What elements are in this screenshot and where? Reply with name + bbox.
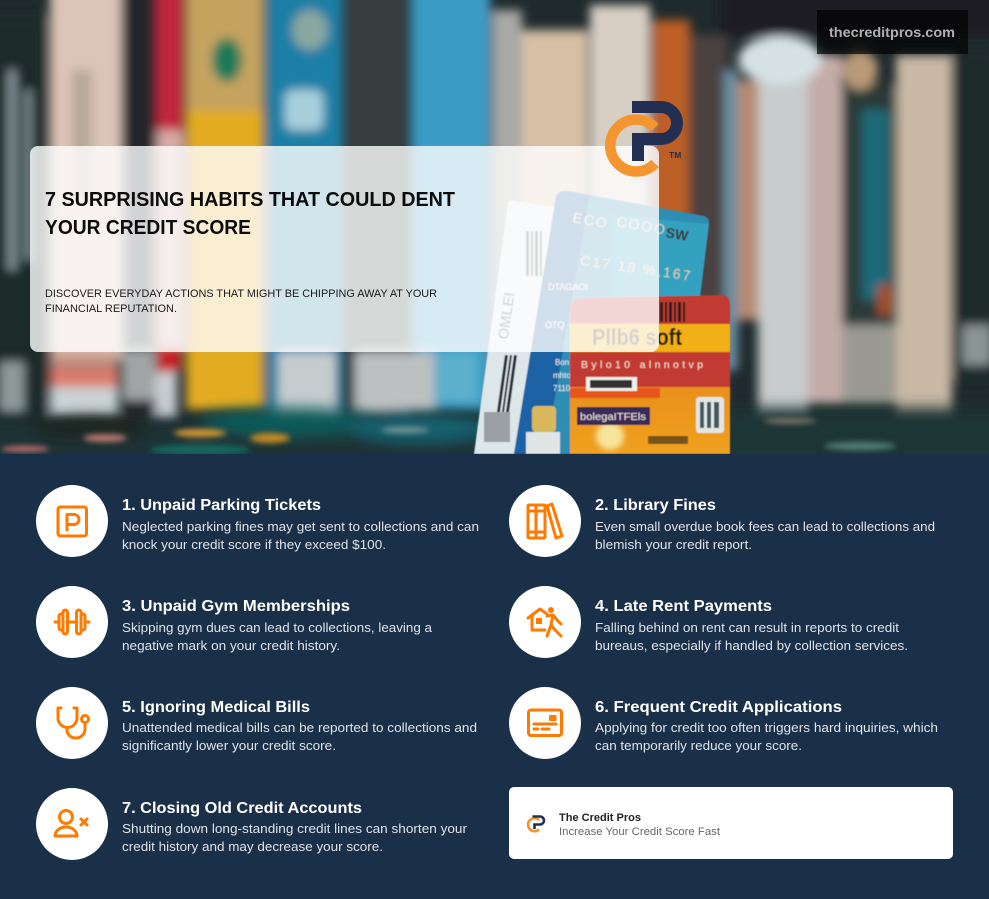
blue card: DTAGAOI	[548, 282, 588, 292]
orange card	[570, 295, 730, 454]
hero panel	[30, 146, 659, 352]
icon: books	[509, 485, 581, 557]
item 4: late rent payments: Falling behind on rent can result in reports to credit	[595, 620, 899, 635]
white card	[474, 201, 556, 454]
item 7: closing old credit accounts: 7. Closing Old Credit Accounts	[122, 800, 362, 817]
item 6: frequent credit applications: Applying for credit too often triggers hard inquiries, which	[595, 720, 938, 735]
brand card	[509, 787, 953, 859]
title	[45, 189, 455, 239]
item 5: ignoring medical bills: 5. Ignoring Medical Bills	[122, 699, 310, 716]
logo: The Credit Pros: TM	[669, 150, 681, 160]
subtitle	[45, 288, 437, 315]
item 3: unpaid gym memberships: 3. Unpaid Gym Memberships	[122, 598, 350, 615]
white card: OMLEI	[495, 291, 519, 341]
book spine details	[212, 38, 242, 82]
icon: parking sign	[36, 485, 108, 557]
domain label box: thecreditpros.com	[829, 24, 955, 40]
item 4: late rent payments	[509, 586, 908, 658]
blue card: C17 18 %,167	[580, 252, 693, 284]
blue card: ECO	[571, 209, 610, 231]
blue card: SW	[664, 224, 690, 244]
item 1: unpaid parking tickets: knock your credit score if they exceed $100.	[122, 537, 386, 552]
domain label box	[817, 10, 968, 54]
title: YOUR CREDIT SCORE	[45, 217, 251, 239]
foreground foliage	[0, 408, 989, 470]
blue card: mhto	[553, 371, 571, 380]
item 5: ignoring medical bills: significantly lower your credit score.	[122, 738, 336, 753]
item 6: frequent credit applications: can temporarily reduce your score.	[595, 738, 802, 753]
item 3: unpaid gym memberships: negative mark on your credit history.	[122, 638, 340, 653]
icon: user with x	[36, 788, 108, 860]
item 4: late rent payments: 4. Late Rent Payments	[595, 598, 772, 615]
navy lower panel	[0, 454, 989, 899]
item 4: late rent payments: bureaus, especially if handled by collection services.	[595, 638, 908, 653]
item 5: ignoring medical bills	[36, 687, 477, 759]
brand card: Increase Your Credit Score Fast	[559, 826, 720, 838]
item 5: ignoring medical bills: Unattended medical bills can be reported to collections and	[122, 720, 477, 735]
title: 7 SURPRISING HABITS THAT COULD DENT	[45, 189, 455, 211]
item 7: closing old credit accounts: Shutting down long-standing credit lines can shorten your	[122, 821, 468, 836]
item 2: library fines: blemish your credit report.	[595, 537, 752, 552]
icon: person leaving house	[509, 586, 581, 658]
item 1: unpaid parking tickets	[36, 485, 479, 557]
brand card: The Credit Pros	[559, 812, 641, 824]
item 6: frequent credit applications	[509, 687, 938, 759]
item 7: closing old credit accounts	[36, 788, 468, 860]
blue card: Bon	[555, 358, 569, 367]
item 2: library fines: Even small overdue book fees can lead to collections and	[595, 519, 935, 534]
item 3: unpaid gym memberships: Skipping gym dues can lead to collections, leaving a	[122, 620, 433, 635]
background photo: blurred bookshelf	[0, 0, 989, 470]
logo: The Credit Pros	[610, 107, 681, 172]
blue card: 7110	[553, 384, 571, 393]
blue card	[514, 191, 709, 454]
icon: credit card	[509, 687, 581, 759]
icon: stethoscope	[36, 687, 108, 759]
subtitle: DISCOVER EVERYDAY ACTIONS THAT MIGHT BE CHIPPING AWAY AT YOUR	[45, 288, 437, 300]
icon: dumbbell	[36, 586, 108, 658]
item 2: library fines: 2. Library Fines	[595, 497, 716, 514]
subtitle: FINANCIAL REPUTATION.	[45, 303, 177, 315]
orange card: bolegaITFEls	[580, 412, 646, 423]
icon: small logo	[528, 816, 544, 831]
item 3: unpaid gym memberships	[36, 586, 433, 658]
item 1: unpaid parking tickets: Neglected parking fines may get sent to collections and can	[122, 519, 479, 534]
item 2: library fines	[509, 485, 935, 557]
item 7: closing old credit accounts: credit history and may decrease your score.	[122, 839, 383, 854]
blue card: COOO	[615, 213, 668, 238]
orange card: Bylo10 alnnotvp	[581, 359, 703, 371]
photo: credit cards	[474, 191, 730, 454]
item 6: frequent credit applications: 6. Frequent Credit Applications	[595, 699, 842, 716]
blue card: OTQ	[545, 320, 564, 330]
orange card: Pllb6 soft	[592, 324, 682, 350]
item 1: unpaid parking tickets: 1. Unpaid Parking Tickets	[122, 497, 321, 514]
